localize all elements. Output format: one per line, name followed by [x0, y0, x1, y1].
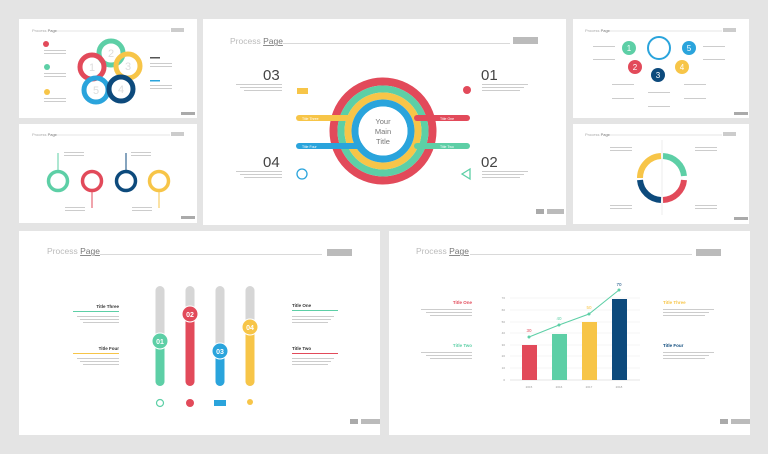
bar chart: 50 — [586, 305, 592, 310]
chart: rings: Title Three — [302, 117, 319, 121]
panel: top-left slide (five circles): 5 — [93, 85, 99, 97]
heading: Process Page: Process Page — [230, 36, 283, 46]
chart: rings: Title Four — [302, 145, 317, 149]
chart: rings: Main — [375, 127, 391, 136]
panel: top-left slide (five circles): 1 — [89, 62, 95, 74]
heading: Process Page — [47, 246, 100, 256]
panel: top-left slide (five circles): 2 — [108, 48, 114, 60]
panel: top-right slide (numbered circles): 3 — [656, 71, 661, 80]
bar chart: 2017 — [586, 385, 593, 389]
text: 02: 02 — [481, 154, 498, 171]
bar chart: 60 — [502, 308, 505, 312]
panel: center slide (concentric rings) — [203, 19, 566, 225]
text: Title Three: Title Three — [96, 304, 119, 309]
chart: sliders: 04 — [246, 325, 254, 332]
panel: top-right slide (numbered circles): Process Page — [585, 28, 611, 33]
bar chart — [502, 282, 640, 389]
bar chart: 20 — [502, 354, 505, 358]
bar chart: 2016 — [556, 385, 563, 389]
chart: sliders: 02 — [186, 312, 194, 319]
chart: rings: Title Two — [440, 145, 454, 149]
panel: top-left slide (five circles): 3 — [125, 61, 131, 73]
panel: top-right slide (numbered circles): 1 — [627, 44, 632, 53]
text: Title Three: Title Three — [663, 300, 686, 305]
icons — [297, 88, 308, 94]
panel: mid-left slide (timeline circles): Process Page — [32, 132, 58, 137]
bar chart: 40 — [502, 331, 505, 335]
text: Title One: Title One — [292, 303, 312, 308]
bar chart: 30 — [526, 328, 532, 333]
chart: sliders — [152, 286, 258, 386]
chart: rings — [296, 82, 470, 180]
panel: mid-left slide (timeline circles) — [19, 124, 197, 223]
icons — [156, 400, 164, 406]
text: Title Two: Title Two — [453, 343, 472, 348]
chart: sliders: 03 — [216, 349, 224, 356]
panel: bottom-left slide (sliders) — [19, 231, 380, 435]
bar chart: 2018 — [616, 385, 623, 389]
panel: top-right slide (numbered circles): 5 — [687, 44, 692, 53]
panel: top-right slide (numbered circles) — [573, 19, 749, 118]
panel: top-right slide (numbered circles): 2 — [633, 63, 638, 72]
bar chart: 2015 — [526, 385, 533, 389]
text: Title Four: Title Four — [99, 346, 119, 351]
panel: top-left slide (five circles): 4 — [118, 84, 124, 96]
text: Title One: Title One — [453, 300, 472, 305]
bar chart: 0 — [503, 378, 505, 382]
text: Title Four: Title Four — [663, 343, 684, 348]
panel: bottom-right slide (bar chart) — [389, 231, 750, 435]
chart: rings: Title One — [440, 117, 454, 121]
bar chart: 70 — [616, 282, 622, 287]
bar chart: 70 — [502, 296, 505, 300]
panel: top-left slide (five circles) — [19, 19, 197, 118]
heading: Process Page — [416, 246, 469, 256]
chart: rings: Title — [376, 137, 390, 146]
text: 04: 04 — [263, 154, 280, 171]
text: 01: 01 — [481, 67, 498, 84]
panel: mid-right slide (donut) — [573, 124, 749, 224]
bar chart: 50 — [502, 320, 505, 324]
bar chart: 40 — [556, 316, 562, 321]
panel: top-left slide (five circles): Process Page — [32, 28, 58, 33]
chart: rings: Your — [375, 117, 391, 126]
text: 03: 03 — [263, 67, 280, 84]
bar chart: 10 — [502, 366, 505, 370]
text: Title Two: Title Two — [292, 346, 311, 351]
panel: mid-right slide (donut): Process Page — [585, 132, 611, 137]
panel: top-right slide (numbered circles): 4 — [680, 63, 685, 72]
bar chart: 30 — [502, 343, 505, 347]
chart: sliders: 01 — [156, 339, 164, 346]
